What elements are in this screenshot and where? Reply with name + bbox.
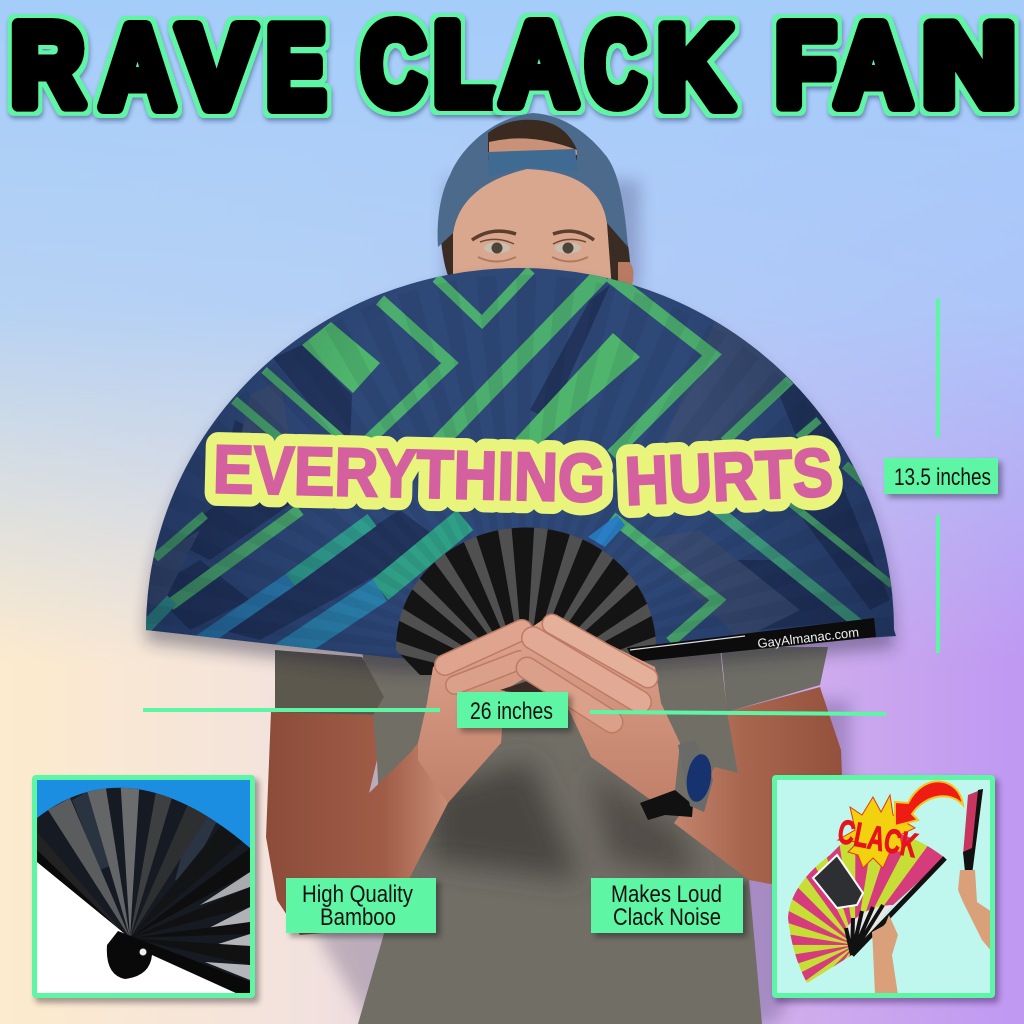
handle with website	[627, 618, 876, 662]
slogan banner: HURTS	[623, 434, 834, 520]
lower arm	[872, 915, 898, 995]
title: F	[776, 0, 836, 130]
slogan banner: EVERYTHING	[212, 431, 606, 517]
burst	[838, 795, 915, 868]
dimension: width	[143, 692, 886, 732]
handle with website: GayAlmanac.com	[757, 625, 860, 651]
eyes and brows	[472, 231, 594, 262]
head	[438, 113, 633, 290]
label: 26 inches: 26 inches	[470, 698, 553, 725]
title: N	[922, 0, 1016, 130]
solid green blocks	[302, 322, 640, 452]
title: A	[500, 0, 578, 129]
title: K	[658, 2, 732, 132]
shirt torso	[358, 648, 762, 1024]
title: A	[100, 2, 174, 132]
bamboo sticks	[396, 528, 656, 675]
body shadow	[285, 180, 850, 1024]
left arm	[266, 700, 448, 935]
left fingers	[445, 630, 522, 685]
wrist watch	[640, 740, 714, 820]
gap between hands	[500, 680, 552, 695]
label: 13.5 inches	[884, 458, 1002, 498]
clack word: CLACK	[835, 813, 921, 865]
striped fan	[788, 834, 945, 983]
slogan banner: HURTS	[623, 434, 834, 520]
title: C	[586, 0, 646, 129]
hands and watch	[418, 615, 714, 820]
title: L	[434, 0, 496, 129]
title	[11, 0, 1016, 132]
title: V	[178, 2, 254, 132]
title: A	[836, 0, 912, 130]
right arm	[674, 687, 843, 884]
fan	[136, 268, 903, 677]
callout: high quality bamboo: High Quality	[302, 881, 413, 908]
blue accent	[588, 515, 625, 547]
title: R	[11, 0, 84, 130]
fan paper base	[140, 260, 900, 670]
red arrow	[895, 781, 963, 826]
man figure	[266, 113, 850, 1024]
plastic cup	[813, 855, 863, 908]
green stripes	[155, 270, 895, 642]
callout: makes loud clack noise: Makes Loud	[611, 881, 722, 908]
fan shadow	[146, 280, 896, 672]
right hand	[520, 615, 680, 803]
slogan banner: EVERYTHING	[212, 431, 606, 517]
left hand	[418, 623, 535, 803]
stick fan section	[846, 858, 945, 955]
panel: bamboo close-up	[32, 775, 259, 1003]
callout: makes loud clack noise	[591, 878, 747, 937]
hinge and handle	[107, 931, 250, 994]
label: 13.5 inches: 13.5 inches	[894, 464, 991, 491]
small closed fan	[963, 789, 983, 875]
callout: high quality bamboo: Bamboo	[320, 904, 396, 931]
dimension: height	[884, 298, 1002, 653]
dark geometric panels	[150, 285, 890, 640]
callout: high quality bamboo	[286, 878, 440, 937]
title: C	[362, 0, 426, 129]
callout: makes loud clack noise: Clack Noise	[613, 904, 721, 931]
stick fan	[37, 788, 250, 982]
slogan banner	[212, 431, 834, 520]
backwards cap	[438, 113, 628, 247]
blue fabric	[37, 780, 250, 850]
label: 26 inches	[457, 692, 572, 732]
right fingers	[527, 624, 648, 722]
shirt shadows	[430, 760, 700, 880]
raised arm	[958, 870, 992, 952]
panel: clack demonstration	[772, 775, 999, 1015]
right sleeve	[721, 647, 828, 712]
title: E	[266, 2, 326, 132]
left sleeve	[275, 650, 384, 715]
edge darkening and pleats	[146, 275, 896, 658]
